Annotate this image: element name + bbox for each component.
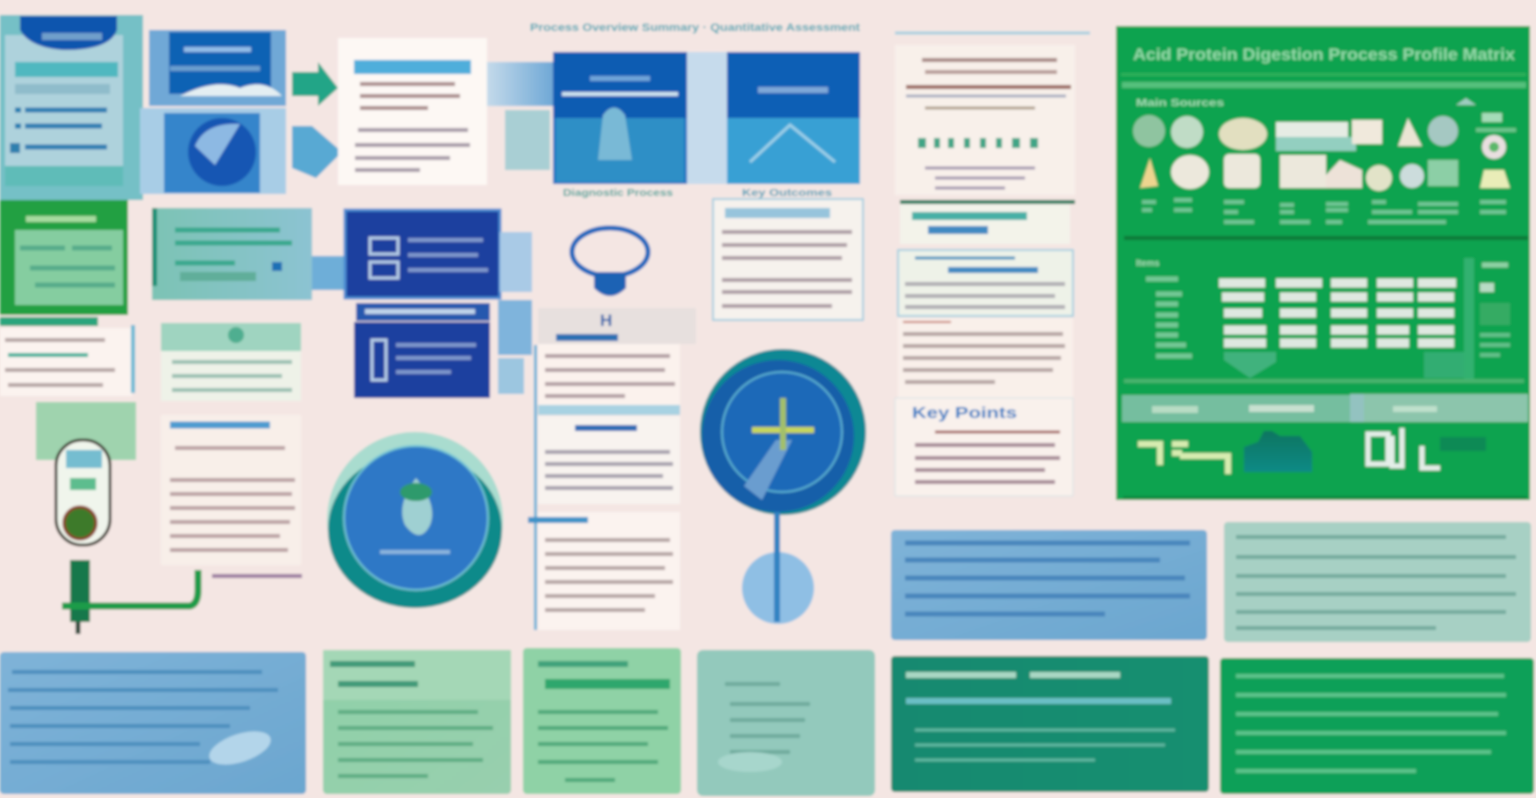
panel: center text stack (528, 308, 696, 630)
icon: green pipe (62, 560, 198, 634)
panel: right text column middle (898, 200, 1075, 398)
panel: text card lower left (161, 415, 302, 578)
label: mountain card caption: Key Outcomes (742, 188, 833, 199)
labels: food grid captions (1142, 200, 1506, 222)
arrow: blue (292, 126, 342, 178)
chart: left steps (1138, 444, 1228, 474)
panel: blue mountain card (727, 52, 860, 199)
chart: data table (1219, 258, 1474, 382)
heading: lower card: Key Points (912, 405, 1017, 422)
icon: ring pendant (572, 228, 648, 296)
panel: lower banners (1122, 394, 1528, 422)
chart: line icons (1368, 428, 1440, 468)
panel: text card under mountain (713, 199, 863, 320)
icon: blue orb with droplet (327, 432, 503, 608)
panel: bottom mint 1 (323, 650, 511, 794)
panel: clock card (140, 108, 286, 194)
label: table heading: Items (1136, 258, 1160, 268)
panel: mint note with header (161, 323, 301, 401)
chart: small bars (1440, 437, 1486, 451)
column: table side note (1480, 265, 1510, 355)
panel: bottom blue (0, 652, 306, 794)
panel: right text column top (895, 33, 1090, 195)
panel: green note (0, 200, 128, 326)
title: top centre: Process Overview Summary · Quantitative Assessment (530, 22, 860, 34)
label: section heading: Main Sources (1136, 98, 1225, 109)
label: figure card caption: Diagnostic Process (563, 188, 674, 199)
panel: bottom dark teal (891, 656, 1209, 792)
icons: food grid (1133, 113, 1516, 191)
panel: big green dashboard (1116, 26, 1530, 500)
icon: pin stem and small orb (742, 512, 814, 624)
panel: blue figure card (553, 52, 687, 199)
panel: blue header card (149, 30, 286, 106)
panel: navy step 2 (354, 300, 532, 398)
chart: area (1244, 431, 1312, 472)
icon: capsule device (36, 402, 136, 545)
heading: center stack: H (600, 311, 612, 330)
panel: right text column lower (895, 398, 1073, 496)
list: table rows (1146, 279, 1192, 356)
icon: compass orb with cross (700, 349, 866, 515)
panel: top left list (0, 15, 143, 200)
panel: teal note (152, 208, 348, 300)
panel: teal text mid right (1224, 522, 1531, 642)
panel: navy step 1 (345, 210, 532, 298)
connector: top gradients (487, 52, 727, 184)
panel: blue text mid right (891, 530, 1207, 640)
panel: bottom green (1220, 658, 1534, 794)
title: dashboard: Acid Protein Digestion Process Profile Matrix (1133, 45, 1516, 64)
arrow: green (292, 62, 338, 106)
panel: bottom sage (697, 650, 875, 796)
panel: white note left (0, 325, 135, 396)
panel: bottom mint 2 (523, 648, 681, 794)
panel: white text card top (338, 38, 487, 185)
